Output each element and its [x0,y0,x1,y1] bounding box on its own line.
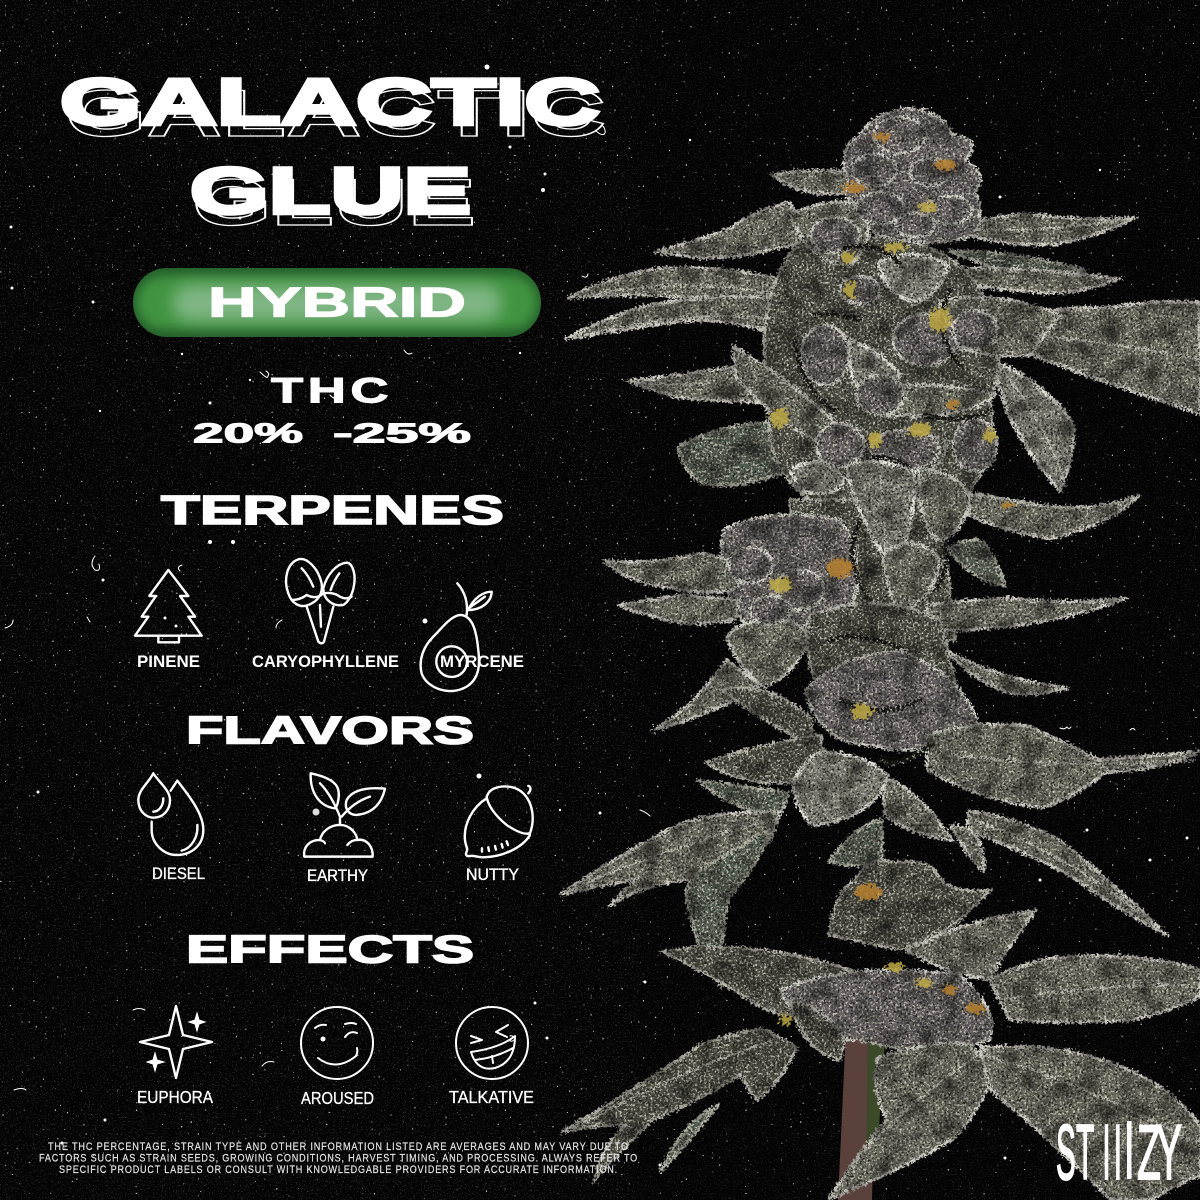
icon: oil drops [138,773,203,855]
title outline layer: GLUE [192,165,476,239]
heading: flavors: FLAVORS [186,710,474,752]
logo: STIIZY: ZY [1137,1109,1182,1197]
upper cola leaves [565,108,1200,517]
THC range: -25% [333,418,471,448]
title outline layer [65,76,606,239]
icon: pine tree [135,570,202,642]
THC range [193,372,471,448]
terpene icons and labels [135,559,524,691]
strain type pill: Hybrid [133,268,541,337]
flavor icons and labels [138,773,533,885]
disclaimer text: FACTORS SUCH AS STRAIN SEEDS, GROWING CONDITIONS, HARVEST TIMING, AND PROCESSING. ALWAYS REFER TO [39,1152,638,1164]
label: myrcene: MYRCENE [440,653,524,671]
plant stem [838,1029,886,1200]
strain type pill: Hybrid: HYBRID [208,278,466,326]
title solid layer: GALACTIC [60,64,600,138]
middle section leaves [605,461,1140,700]
icon: seeds [286,559,355,643]
label: euphora: EUPHORA [137,1087,213,1107]
label: pinene: PINENE [137,653,200,671]
bud lobes [801,117,997,471]
label: talkative: TALKATIVE [449,1087,534,1107]
THC range: 20% [193,418,303,448]
label: nutty: NUTTY [466,866,519,884]
label: caryophyllene: CARYOPHYLLENE [252,653,399,671]
title: Galactic Glue [60,64,606,239]
pistils: orange and yellow hairs [769,133,1014,1025]
disclaimer text: SPECIFIC PRODUCT LABELS OR CONSULT WITH KNOWLEDGABLE PROVIDERS FOR ACCURATE INFORMATION. [59,1164,618,1176]
title solid layer [60,64,600,228]
logo: STIIZY: STII [1056,1109,1122,1196]
logo: STIIZY [1056,1109,1182,1197]
bottom section leaves [560,860,1200,1200]
heading: terpenes: TERPENES [161,487,504,533]
icon: sprout [304,773,385,857]
plant illustration [560,108,1200,1200]
title solid layer: GLUE [190,154,471,228]
effect icons and labels [137,1006,534,1108]
icon: laughing face [456,1007,528,1079]
disclaimer text [39,1141,638,1176]
THC range: THC [271,372,393,410]
icon: acorn [465,786,533,857]
heading: effects: EFFECTS [186,928,474,972]
label: diesel: DIESEL [152,865,205,883]
leaf veins [570,219,1200,1195]
label: earthy: EARTHY [307,867,368,885]
icon: avocado [421,583,492,691]
lower bud leaves [560,650,1200,985]
label: aroused: AROUSED [301,1088,374,1108]
disclaimer text: THE THC PERCENTAGE, STRAIN TYPE AND OTHER INFORMATION LISTED ARE AVERAGES AND MAY VARY DUE TO [48,1141,629,1153]
title outline layer: GALACTIC [65,76,606,150]
frosted leaves and buds [560,108,1200,1200]
icon: winking face [301,1007,373,1079]
icon: sparkles [140,1006,212,1078]
